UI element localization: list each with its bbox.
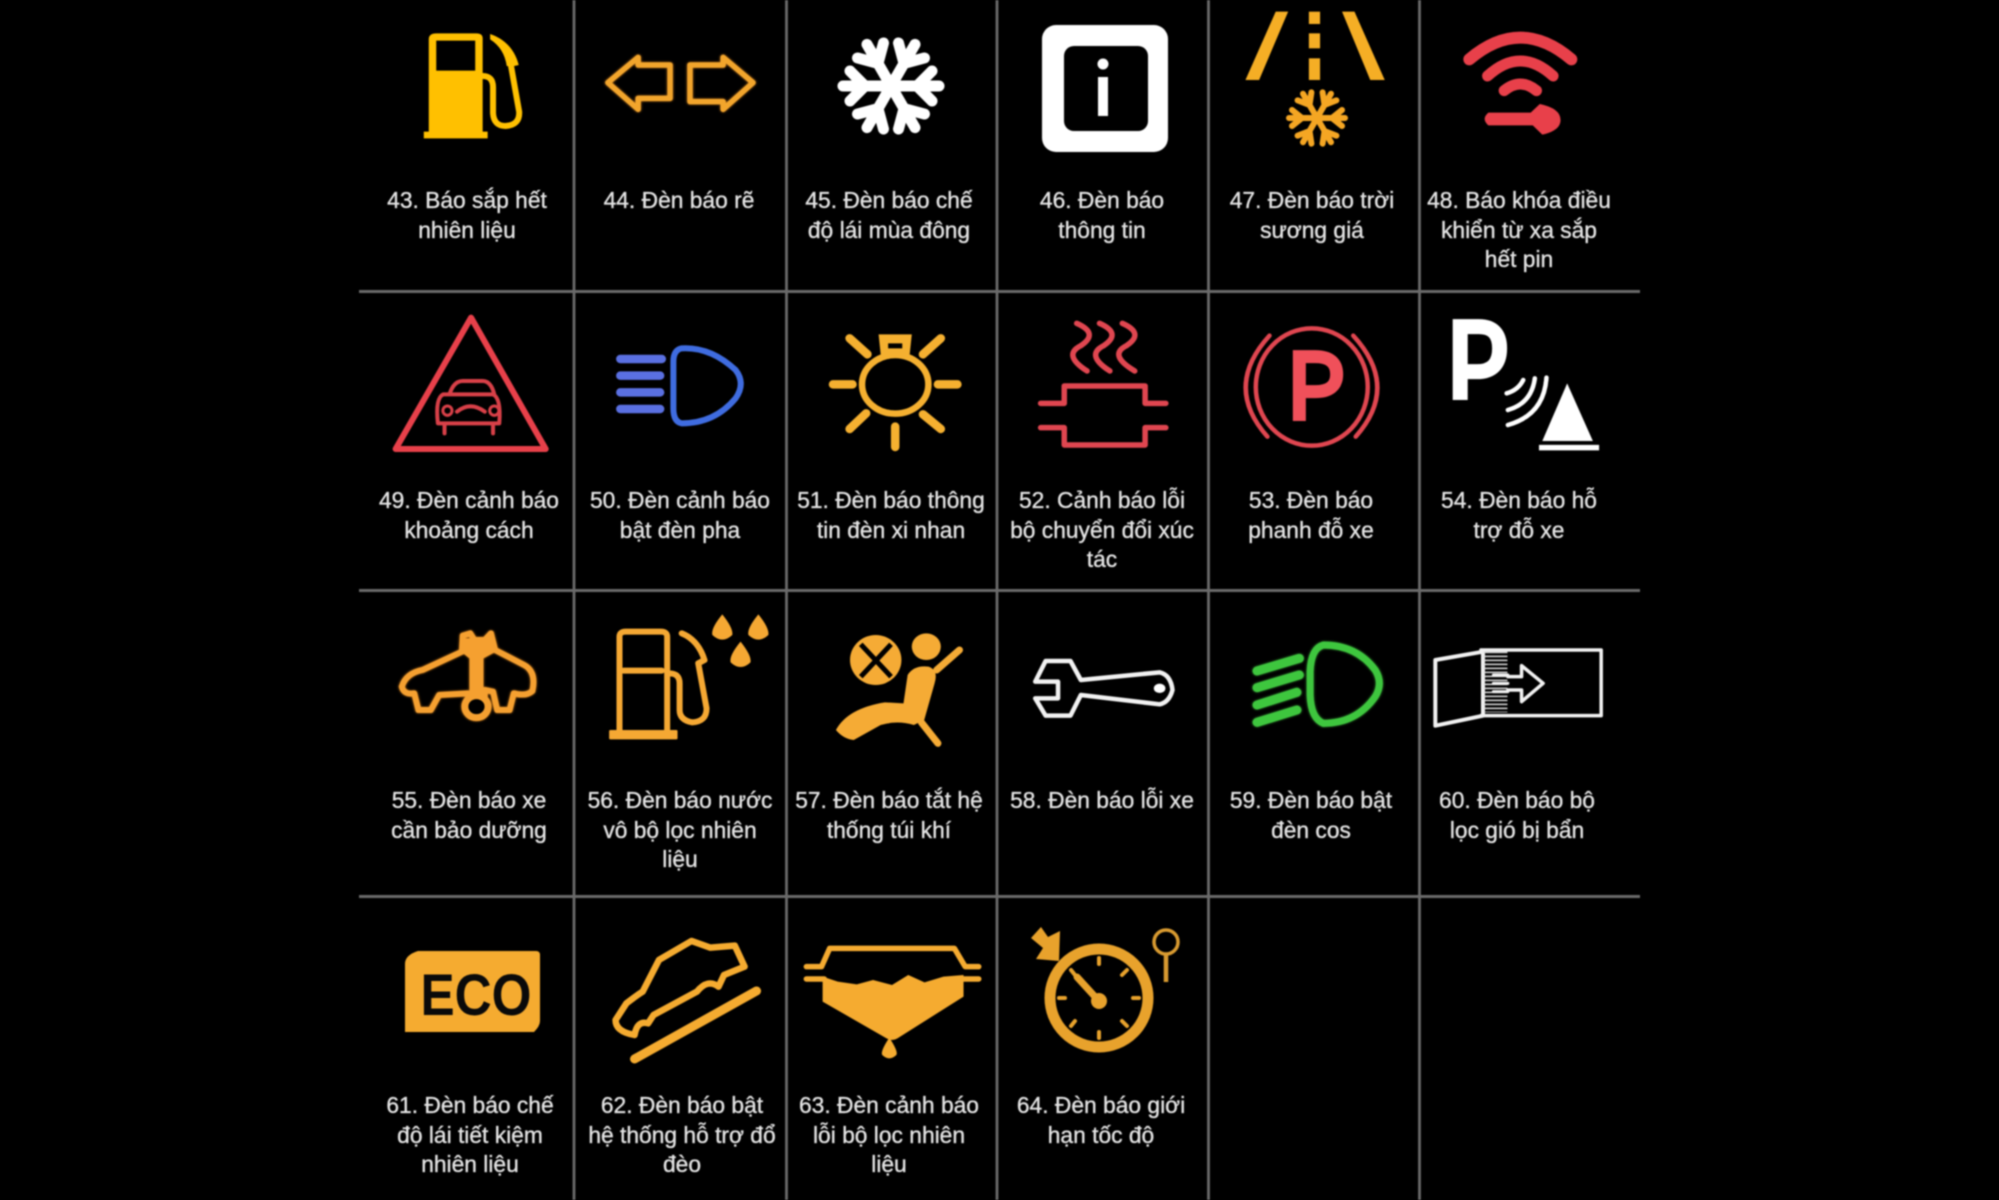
label 58: 58. Đèn báo lỗi xe <box>1010 787 1194 813</box>
icon: bulb with rays <box>833 334 957 447</box>
panel: item 54 <box>1441 327 1599 543</box>
panel: item 50 <box>590 348 770 543</box>
panel: item 48 <box>1427 38 1611 272</box>
panel: item 52 <box>1010 323 1194 572</box>
panel: item 60 <box>1435 650 1601 843</box>
panel: item 49 <box>379 318 559 543</box>
panel: item 46 <box>1040 25 1168 243</box>
panel: item 56 <box>588 614 772 872</box>
icon: blue high beam <box>620 348 741 423</box>
label 47: 47. Đèn báo trời <box>1230 187 1394 213</box>
label 48: hết pin <box>1485 246 1553 272</box>
label 57: 57. Đèn báo tắt hệ <box>795 787 983 813</box>
label 48: khiển từ xa sắp <box>1441 217 1597 243</box>
label 56: 56. Đèn báo nước <box>588 787 772 813</box>
panel: item 57 <box>795 633 983 843</box>
panel: item 43 <box>387 33 548 243</box>
label 54: trợ đỗ xe <box>1474 517 1564 543</box>
panel: item 45 <box>805 37 973 243</box>
panel: item 44 <box>604 57 754 213</box>
label 64: hạn tốc độ <box>1048 1122 1154 1148</box>
panel: item 61 <box>386 951 554 1177</box>
panel: item 59 <box>1230 645 1393 843</box>
label 45: 45. Đèn báo chế <box>805 187 973 213</box>
icon: remote key battery <box>1469 38 1571 135</box>
panel: item 58 <box>1010 661 1194 813</box>
label 52: bộ chuyển đổi xúc <box>1010 517 1194 543</box>
icon: car on hill <box>616 941 756 1059</box>
panel: item 51 <box>797 334 985 543</box>
label 64: 64. Đèn báo giới <box>1017 1092 1185 1118</box>
label 49: 49. Đèn cảnh báo <box>379 487 559 513</box>
icon: fuel pump <box>424 33 519 138</box>
icon: parking assist <box>1460 327 1599 448</box>
icon: white snowflake <box>843 37 939 135</box>
label 51: tin đèn xi nhan <box>817 517 965 543</box>
panel: item 63 <box>799 948 979 1177</box>
label 61: độ lái tiết kiệm <box>397 1122 543 1148</box>
icon: catalytic converter <box>1041 323 1166 445</box>
label 56: vô bộ lọc nhiên <box>603 817 757 843</box>
label 62: đèo <box>663 1151 701 1177</box>
panel: item 53 <box>1246 328 1377 543</box>
label 57: thống túi khí <box>827 817 952 843</box>
label 50: bật đèn pha <box>620 517 741 543</box>
label 61: nhiên liệu <box>421 1151 519 1177</box>
label 63: lỗi bộ lọc nhiên <box>813 1122 965 1148</box>
label 52: tác <box>1087 546 1117 572</box>
label 47: sương giá <box>1260 217 1364 243</box>
label 43: 43. Báo sắp hết <box>387 187 548 213</box>
icon: icy road <box>1245 12 1385 146</box>
icon: parking brake <box>1246 328 1377 446</box>
label 59: 59. Đèn báo bật <box>1230 787 1393 813</box>
label 56: liệu <box>662 846 698 872</box>
label 43: nhiên liệu <box>418 217 516 243</box>
icon: green low beam <box>1257 645 1379 723</box>
icon: clogged fuel filter <box>806 948 979 1058</box>
icon: airbag off <box>836 633 959 743</box>
icon: ECO badge: ECO <box>420 963 532 1028</box>
label 62: hệ thống hỗ trợ đổ <box>588 1122 776 1148</box>
label 48: 48. Báo khóa điều <box>1427 187 1611 213</box>
label 46: 46. Đèn báo <box>1040 187 1164 213</box>
icon: water in fuel filter <box>609 614 768 739</box>
label 49: khoảng cách <box>404 517 534 543</box>
label 53: phanh đỗ xe <box>1248 517 1374 543</box>
icon: turn signal arrows <box>608 57 753 109</box>
panel: item 47 <box>1230 12 1394 243</box>
panel: item 64 <box>1017 927 1185 1148</box>
label 61: 61. Đèn báo chế <box>386 1092 554 1118</box>
panel: item 55 <box>391 633 547 843</box>
icon: wrench <box>1035 661 1172 716</box>
icon: car on jack <box>402 633 533 718</box>
label 54: 54. Đèn báo hỗ <box>1441 487 1597 513</box>
label 52: 52. Cảnh báo lỗi <box>1019 487 1185 513</box>
label 63: 63. Đèn cảnh báo <box>799 1092 979 1118</box>
icon: ECO badge <box>405 951 540 1032</box>
icon: distance warning triangle <box>396 318 546 449</box>
label 46: thông tin <box>1058 217 1146 243</box>
label 50: 50. Đèn cảnh báo <box>590 487 770 513</box>
icon: speed limiter gauge <box>1031 927 1178 1047</box>
label 55: cần bảo dưỡng <box>391 817 547 843</box>
label 63: liệu <box>871 1151 907 1177</box>
panel: item 62 <box>588 941 776 1177</box>
label 53: 53. Đèn báo <box>1249 487 1373 513</box>
label 62: 62. Đèn báo bật <box>601 1092 764 1118</box>
label 44: 44. Đèn báo rẽ <box>604 187 754 213</box>
label 60: lọc gió bị bẩn <box>1450 817 1584 843</box>
label 59: đèn cos <box>1271 817 1351 843</box>
label 55: 55. Đèn báo xe <box>392 787 546 813</box>
label 51: 51. Đèn báo thông <box>797 487 985 513</box>
label 60: 60. Đèn báo bộ <box>1439 787 1595 813</box>
icon: dirty air filter <box>1435 650 1601 726</box>
label 45: độ lái mùa đông <box>808 217 970 243</box>
icon: information square <box>1042 25 1168 152</box>
